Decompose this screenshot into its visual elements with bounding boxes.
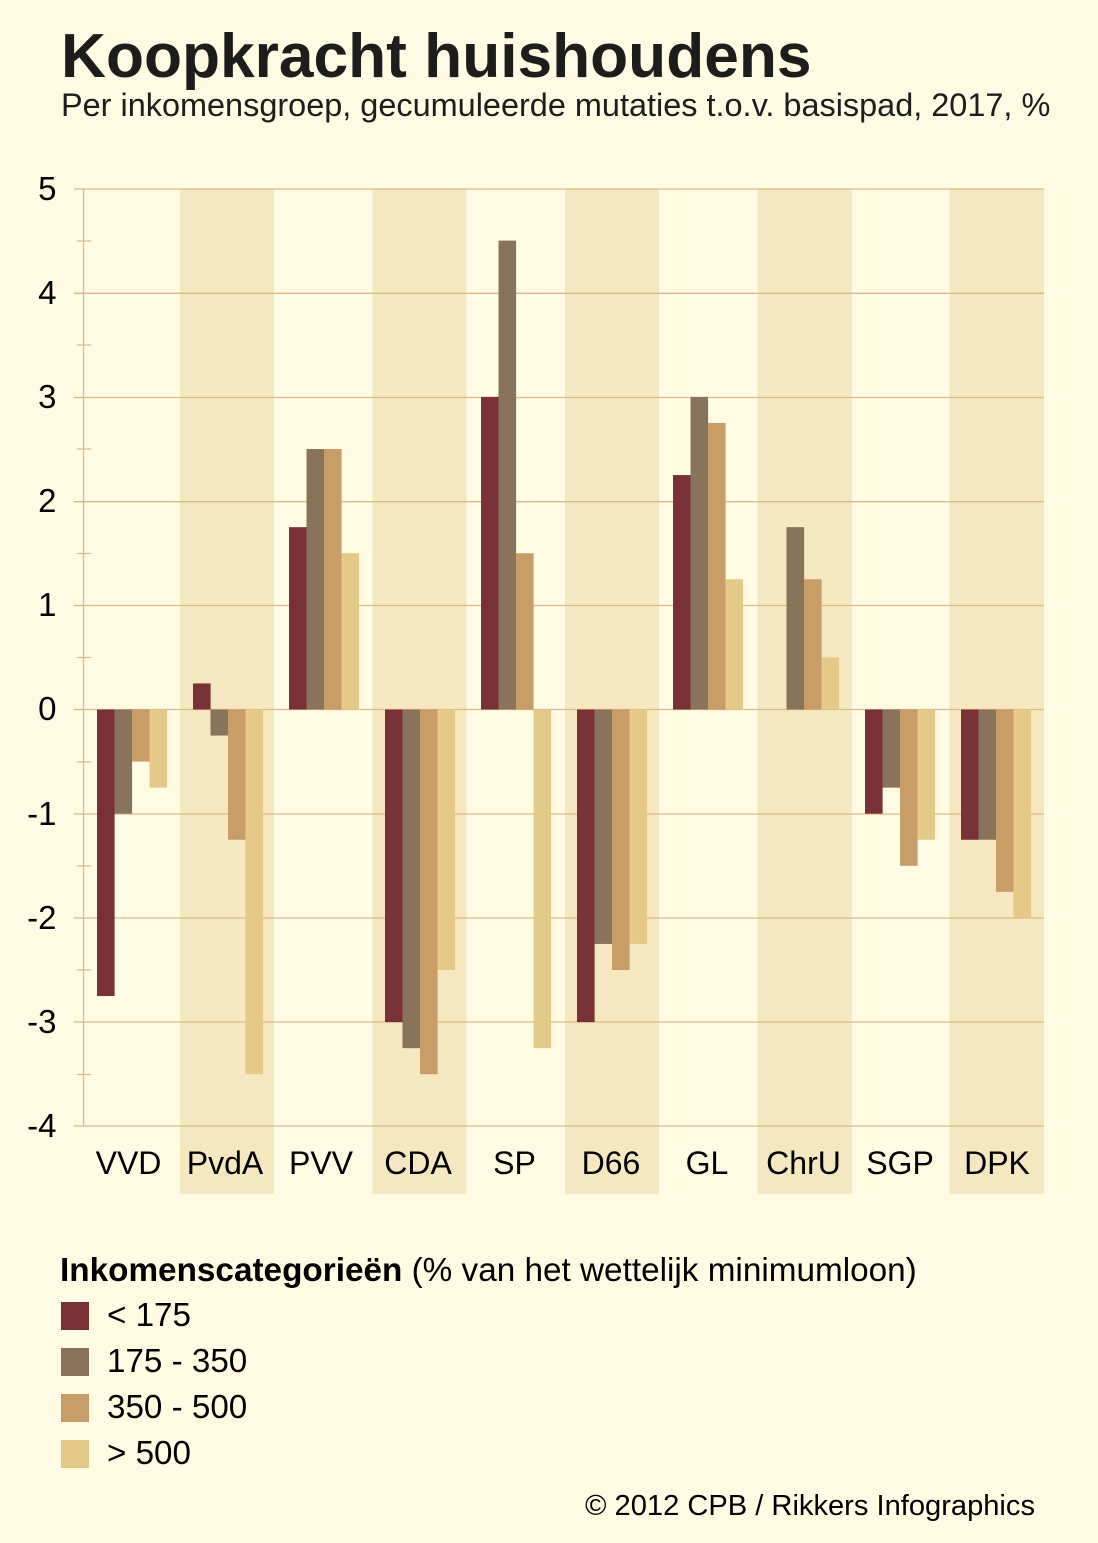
bars: GL [673,397,743,710]
subtitle: Per inkomensgroep, gecumuleerde mutaties t.o.v. basispad, 2017, % [61,87,1050,123]
y axis labels: 5 [38,170,56,207]
legend item: 350-500: 350 - 500 [107,1389,247,1426]
x axis party labels: PvdA [187,1145,264,1181]
bars: SGP [865,710,935,866]
legend item: 175-350: 175 - 350 [107,1343,247,1380]
bars: ChrU [786,527,839,710]
bars: PVV [289,449,359,710]
legend [60,1252,917,1472]
y axis labels [27,170,56,1144]
x axis party labels [96,1145,1030,1181]
y axis labels: -1 [27,795,56,832]
x axis party labels: SP [493,1145,536,1181]
x axis party labels: VVD [96,1145,161,1181]
legend heading: Inkomenscategorieën (% van het wettelijk minimumloon) [60,1252,917,1289]
x axis party labels: D66 [582,1145,640,1181]
x axis party labels: GL [686,1145,728,1181]
x axis party labels: PVV [289,1145,354,1181]
bars: D66 [577,710,647,1022]
y axis labels: 1 [38,586,56,623]
y axis labels: 2 [38,482,56,519]
bars: DPK [961,710,1031,918]
bars: PvdA [193,683,263,1074]
y axis labels: -2 [27,899,56,936]
y axis labels: -3 [27,1003,56,1040]
y axis labels: 3 [38,378,56,415]
alternating party bands [180,189,1044,1194]
legend item: above 500: > 500 [107,1435,191,1472]
legend item: below 175: < 175 [107,1297,191,1334]
x axis party labels: CDA [384,1145,452,1181]
y axis labels: 4 [38,274,56,311]
x axis party labels: ChrU [766,1145,841,1181]
legend item: above 500 [61,1435,191,1472]
bars: CDA [385,710,455,1074]
credit: © 2012 CPB / Rikkers Infographics [585,1490,1035,1522]
y axis labels: 0 [38,690,56,727]
bars: SP [481,241,551,1048]
legend item: below 175 [61,1297,191,1334]
x axis party labels: DPK [964,1145,1030,1181]
y axis labels: -4 [27,1107,56,1144]
bar chart [27,170,1044,1194]
bars: VVD [97,710,167,996]
x axis party labels: SGP [866,1145,934,1181]
title: Koopkracht huishoudens [61,22,812,91]
